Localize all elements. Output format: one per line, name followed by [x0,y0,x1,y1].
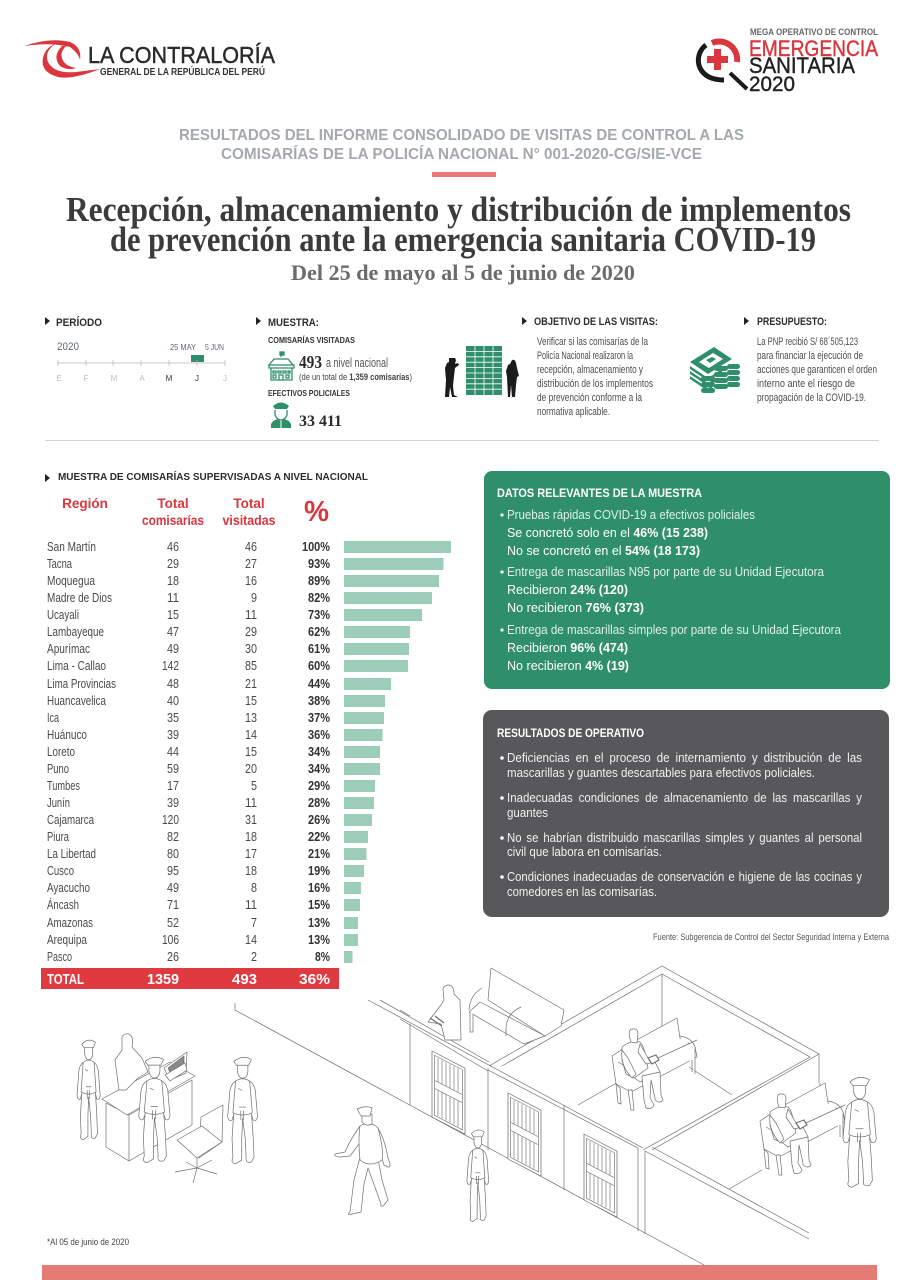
data list: Recibieron 24% (120) [507,582,628,597]
panel: muestra: a nivel nacional [326,356,388,370]
table rows with bars: Junín [47,796,70,810]
table rows with bars: 106 [162,933,179,947]
table rows with bars: 37% [308,711,330,725]
table rows with bars: 60% [308,659,330,673]
desk and laptop [102,1052,195,1161]
table rows with bars: 19% [308,864,330,878]
panel: muestra: EFECTIVOS POLICIALES [268,388,350,398]
data list: Entrega de mascarillas N95 por parte de su Unidad Ejecutora [507,564,825,579]
table rows with bars: Cusco [47,864,74,878]
table rows with bars: 26% [308,813,330,827]
table rows with bars: La Libertad [47,847,96,861]
table rows with bars: 22% [308,830,330,844]
table rows with bars: Tumbes [47,779,80,793]
table rows with bars: Loreto [47,745,75,759]
table header: Total [157,496,189,511]
data list: Se concretó solo en el 46% (15 238) [507,525,708,540]
panel: objetivo de las visitas: Policía Nacional realizaron la [537,350,634,362]
table total row: 36% [299,972,330,988]
person seated in room [612,1018,697,1110]
table rows with bars: 62% [308,625,330,639]
table rows with bars: 34% [308,745,330,759]
table rows with bars: 44 [167,745,179,759]
table: muestra de comisarías supervisadas: MUESTRA DE COMISARÍAS SUPERVISADAS A NIVEL NACIONAL [58,470,369,483]
table total row: 493 [232,972,257,988]
table rows with bars: 11 [167,591,179,605]
table rows with bars: 14 [245,933,257,947]
panel: muestra: 33 411 [299,413,342,430]
table rows with bars: 8 [251,881,257,895]
table rows with bars: 71 [167,898,179,912]
results list: civil que labora en comisarías. [507,844,662,859]
table rows with bars: 29 [245,625,257,639]
table rows with bars: Arequipa [47,933,87,947]
panel: período: M [166,374,173,383]
table rows with bars: Lima - Callao [47,659,106,673]
data list: Entrega de mascarillas simples por parte de su Unidad Ejecutora [507,622,842,637]
panel: presupuesto: PRESUPUESTO: [757,316,827,328]
table rows with bars: San Martín [47,540,96,554]
logo: La Contraloría [24,40,276,78]
table rows with bars: 31 [245,813,257,827]
panel: presupuesto: interno ante el riesgo de [757,378,855,390]
panel: período: 25 MAY [170,342,196,352]
table rows with bars: 85 [245,659,257,673]
table rows with bars: 21% [308,847,330,861]
results list: No se habrían distribuido mascarillas simples y guantes al personal [507,830,862,845]
table rows with bars: Amazonas [47,916,93,930]
table rows with bars: 13 [245,711,257,725]
table rows with bars: 7 [251,916,257,930]
table rows with bars: 49 [167,881,179,895]
data list: Pruebas rápidas COVID-19 a efectivos policiales [507,507,755,522]
person seated outside [760,1083,845,1175]
panel: período: J [223,374,227,383]
panel: muestra: COMISARÍAS VISITADAS [268,335,355,345]
panel: período: 2020 [57,341,79,353]
table rows with bars: 93% [308,557,330,571]
logo: Emergencia Sanitaria 2020 [698,27,878,96]
panel: objetivo de las visitas: recepción, almacenamiento y [537,364,643,376]
table rows with bars: Piura [47,830,69,844]
table rows with bars: 46 [167,540,179,554]
table rows with bars: Lambayeque [47,625,104,639]
table rows with bars: 15 [167,608,179,622]
table rows with bars: 8% [315,950,330,964]
panel: período [45,316,227,383]
table rows with bars: 95 [167,864,179,878]
icon: stock and two people [445,346,519,397]
data list: No recibieron 4% (19) [507,658,629,673]
panel: muestra: (de un total de 1,359 comisarías) [299,372,412,382]
table rows with bars: 73% [308,608,330,622]
title: Recepción, almacenamiento y distribución de implementos [66,190,851,229]
building walls [235,966,820,1265]
title [66,190,851,259]
table rows with bars: Moquegua [47,574,95,588]
table rows with bars: 18 [245,830,257,844]
subtitle: informe consolidado: COMISARÍAS DE LA POLICÍA NACIONAL N° 001-2020-CG/SIE-VCE [221,146,702,163]
officer near doors [467,1130,489,1222]
table header: Región [62,496,108,511]
table total row: TOTAL [47,972,84,988]
table rows with bars: 15% [308,898,330,912]
table rows with bars: Huánuco [47,728,87,742]
panel: resultados de operativo [483,710,889,917]
results list: Inadecuadas condiciones de almacenamiento de las mascarillas y [507,790,862,805]
table rows with bars: 30 [245,642,257,656]
table rows with bars: 49 [167,642,179,656]
logo: La Contraloría: GENERAL DE LA REPÚBLICA DEL PERÚ [100,65,265,78]
title: de prevención ante la emergencia sanitaria COVID-19 [110,220,816,259]
logo: Emergencia Sanitaria 2020: EMERGENCIA [749,36,878,61]
table rows with bars [47,540,451,964]
panel: muestra [256,317,412,430]
table total row: 1359 [147,972,179,988]
table rows with bars: Ayacucho [47,881,90,895]
table header: % [304,496,329,528]
subtitle: informe consolidado [179,127,744,163]
logo: Emergencia Sanitaria 2020: 2020 [749,73,795,96]
table rows with bars: 61% [308,642,330,656]
panel: presupuesto: La PNP recibió S/ 68´505,123 [757,336,858,348]
panel: datos relevantes de la muestra: DATOS RELEVANTES DE LA MUESTRA [497,488,702,500]
table rows with bars: 35 [167,711,179,725]
officer walking [335,1107,390,1215]
panel: período: M [111,374,118,383]
table rows with bars: Cajamarca [47,813,94,827]
table rows with bars: 82 [167,830,179,844]
icon: building [269,352,294,380]
table rows with bars: 80 [167,847,179,861]
panel: objetivo de las visitas: OBJETIVO DE LAS VISITAS: [534,316,658,328]
table rows with bars: Puno [47,762,69,776]
table rows with bars: Ica [47,711,59,725]
date range: Del 25 de mayo al 5 de junio de 2020 [291,260,635,285]
table rows with bars: 39 [167,728,179,742]
table rows with bars: Pasco [47,950,72,964]
data list: Recibieron 96% (474) [507,640,628,655]
table rows with bars: 11 [245,608,257,622]
table rows with bars: 100% [302,540,330,554]
panel: muestra: 493 [299,352,322,372]
table rows with bars: Apurímac [47,642,90,656]
results list: Deficiencias en el proceso de internamiento y distribución de las [507,750,862,765]
panel: objetivo de las visitas: de prevención conforme a la [537,392,643,404]
table rows with bars: 120 [162,813,179,827]
table header: visitadas [222,513,276,528]
panel: período: E [56,374,62,383]
panel: muestra: MUESTRA: [268,317,319,329]
table rows with bars: 48 [167,677,179,691]
panel: presupuesto: para financiar la ejecución de [757,350,863,362]
panel: objetivo de las visitas: Verificar si las comisarías de la [537,336,649,348]
table rows with bars: 89% [308,574,330,588]
table rows with bars: 13% [308,933,330,947]
footer bar [42,1265,877,1280]
table: muestra de comisarías supervisadas [41,470,451,989]
panel: período: J [195,374,199,383]
table rows with bars: 36% [308,728,330,742]
results list [500,750,862,899]
table rows with bars: 11 [245,796,257,810]
footnote: *Al 05 de junio de 2020 [47,1237,129,1248]
logo: Emergencia Sanitaria 2020: MEGA OPERATIVO DE CONTROL [750,27,878,37]
results list: mascarillas y guantes descartables para efectivos policiales. [507,765,815,780]
table rows with bars: 29% [308,779,330,793]
data list: No recibieron 76% (373) [507,600,644,615]
table rows with bars: 15 [245,745,257,759]
panel: período: 5 JUN [205,342,224,352]
table header [62,496,329,528]
logo: La Contraloría: LA CONTRALORÍA [88,42,276,68]
table rows with bars: 15 [245,694,257,708]
panel: período: PERÍODO [56,316,102,329]
results list: guantes [507,805,548,820]
table rows with bars: 2 [251,950,257,964]
table rows with bars: 40 [167,694,179,708]
panel: período: F [84,374,89,383]
table rows with bars: 18 [245,864,257,878]
table rows with bars: 11 [245,898,257,912]
table rows with bars: 34% [308,762,330,776]
table rows with bars: 14 [245,728,257,742]
panel: objetivo de las visitas: distribución de los implementos [537,378,653,390]
table rows with bars: 39 [167,796,179,810]
table rows with bars: 16% [308,881,330,895]
bench and handcuffed person [428,968,564,1044]
table header: comisarías [142,513,204,528]
table rows with bars: 5 [251,779,257,793]
panel: presupuesto: propagación de la COVID-19. [757,392,866,404]
table rows with bars: Ucayali [47,608,79,622]
table header: Total [233,496,265,511]
table rows with bars: 21 [245,677,257,691]
table rows with bars: 17 [167,779,179,793]
panel: período: A [139,374,145,383]
results list: comedores en las comisarías. [507,884,657,899]
table rows with bars: Huancavelica [47,694,106,708]
table rows with bars: 20 [245,762,257,776]
table rows with bars: 29 [167,557,179,571]
results list: Condiciones inadecuadas de conservación e higiene de las cocinas y [507,869,862,884]
panel: datos relevantes de la muestra [484,471,890,689]
table rows with bars: Lima Provincias [47,677,116,691]
panel: resultados de operativo: RESULTADOS DE OPERATIVO [497,728,644,740]
panel: presupuesto: acciones que garanticen el orden [757,364,877,376]
panel: objetivo de las visitas: normativa aplicable. [537,406,610,418]
table rows with bars: 44% [308,677,330,691]
panel: presupuesto [744,316,877,404]
table rows with bars: 9 [251,591,257,605]
table rows with bars: Tacna [47,557,72,571]
office chair [175,1105,223,1183]
officer standing right [843,1077,876,1187]
icon: money and coins [690,347,740,393]
panel: objetivo de las visitas [522,316,658,418]
table rows with bars: 82% [308,591,330,605]
table rows with bars: 28% [308,796,330,810]
table rows with bars: 47 [167,625,179,639]
cell doors [432,1051,617,1217]
icon: police officer [271,402,291,428]
data list [500,507,842,673]
table rows with bars: 13% [308,916,330,930]
table rows with bars: 52 [167,916,179,930]
logo: Emergencia Sanitaria 2020: SANITARIA [749,53,855,78]
table rows with bars: 38% [308,694,330,708]
illustration: police station floor plan [77,966,876,1265]
table rows with bars: Madre de Dios [47,591,112,605]
table rows with bars: 59 [167,762,179,776]
table rows with bars: 27 [245,557,257,571]
table rows with bars: 16 [245,574,257,588]
officers and civilian at desk [77,1034,258,1164]
data list: No se concretó en el 54% (18 173) [507,543,700,558]
table rows with bars: 46 [245,540,257,554]
table rows with bars: 17 [245,847,257,861]
table rows with bars: 26 [167,950,179,964]
table rows with bars: Áncash [47,897,79,912]
table rows with bars: 18 [167,574,179,588]
subtitle: informe consolidado: RESULTADOS DEL INFORME CONSOLIDADO DE VISITAS DE CONTROL A LAS [179,127,744,144]
table total row [41,968,339,989]
table rows with bars: 142 [162,659,179,673]
